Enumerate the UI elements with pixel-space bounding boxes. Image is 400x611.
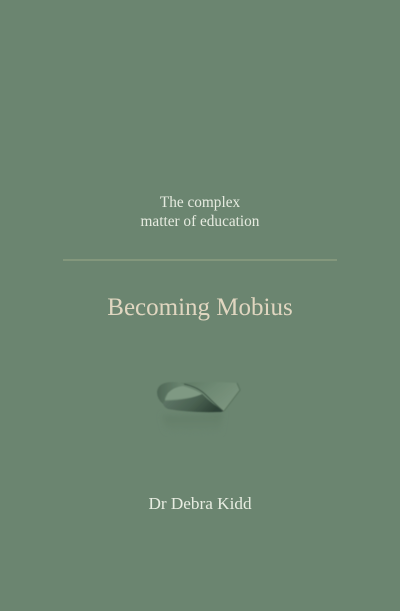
band — [157, 382, 240, 412]
subtitle: The complex — [160, 194, 240, 211]
icon: mobius strip — [156, 382, 240, 414]
reflection — [162, 412, 223, 435]
subtitle: matter of education — [141, 213, 259, 230]
subtitle — [140, 194, 260, 230]
title: Becoming Mobius — [107, 294, 293, 321]
divider rule — [63, 259, 337, 261]
author: Dr Debra Kidd — [148, 494, 252, 513]
